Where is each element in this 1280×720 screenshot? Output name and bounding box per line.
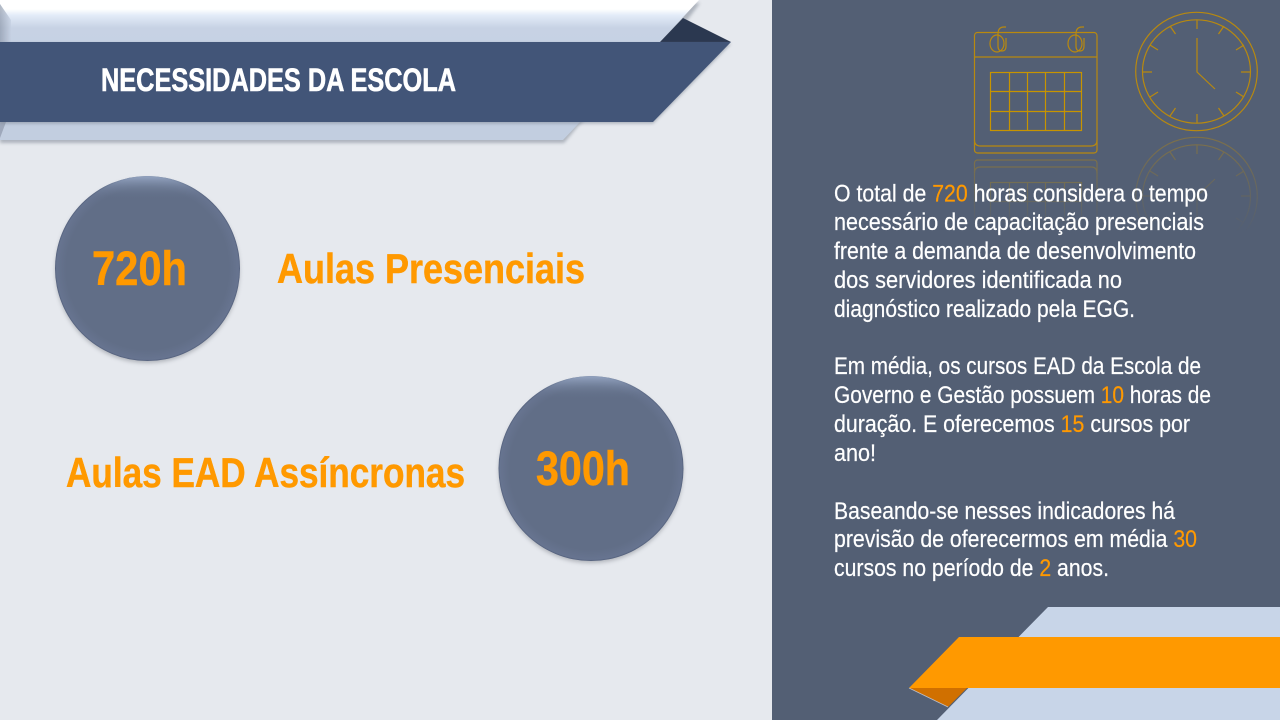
text block: explanation: Baseando-se nesses indicadores há <box>834 498 1176 525</box>
icon: clock <box>1135 12 1258 214</box>
text block: explanation: Governo e Gestão possuem 10 horas de <box>834 382 1211 409</box>
text block: explanation: O total de 720 horas considera o tempo <box>834 180 1208 208</box>
label: Aulas EAD Assíncronas: Aulas EAD Assíncronas <box>66 449 465 496</box>
text block: explanation: diagnóstico realizado pela EGG. <box>834 296 1135 323</box>
stat circle: 720h <box>55 176 240 363</box>
text block: explanation: ano! <box>834 440 876 467</box>
text block: explanation: cursos no período de 2 anos. <box>834 555 1109 582</box>
header ribbon <box>0 0 731 143</box>
text block: explanation: duração. E oferecemos 15 cursos por <box>834 411 1190 438</box>
text block: explanation: Em média, os cursos EAD da Escola de <box>834 353 1201 380</box>
stat circle: 300h <box>498 376 684 563</box>
text block: explanation: necessário de capacitação presenciais <box>834 209 1204 236</box>
title: NECESSIDADES DA ESCOLA <box>101 62 456 98</box>
slide background <box>0 0 772 720</box>
text block: explanation: frente a demanda de desenvolvimento <box>834 238 1196 265</box>
text block: explanation: previsão de oferecermos em média 30 <box>834 526 1197 553</box>
panel: right side <box>772 0 1280 720</box>
stat circle: 720h: 720h <box>92 243 187 296</box>
text block: explanation <box>834 180 1211 582</box>
label: Aulas Presenciais: Aulas Presenciais <box>277 245 585 292</box>
corner ribbon <box>909 607 1280 720</box>
text block: explanation: dos servidores identificada no <box>834 267 1122 294</box>
icon: calendar <box>974 26 1098 214</box>
stat circle: 300h: 300h <box>536 443 630 496</box>
